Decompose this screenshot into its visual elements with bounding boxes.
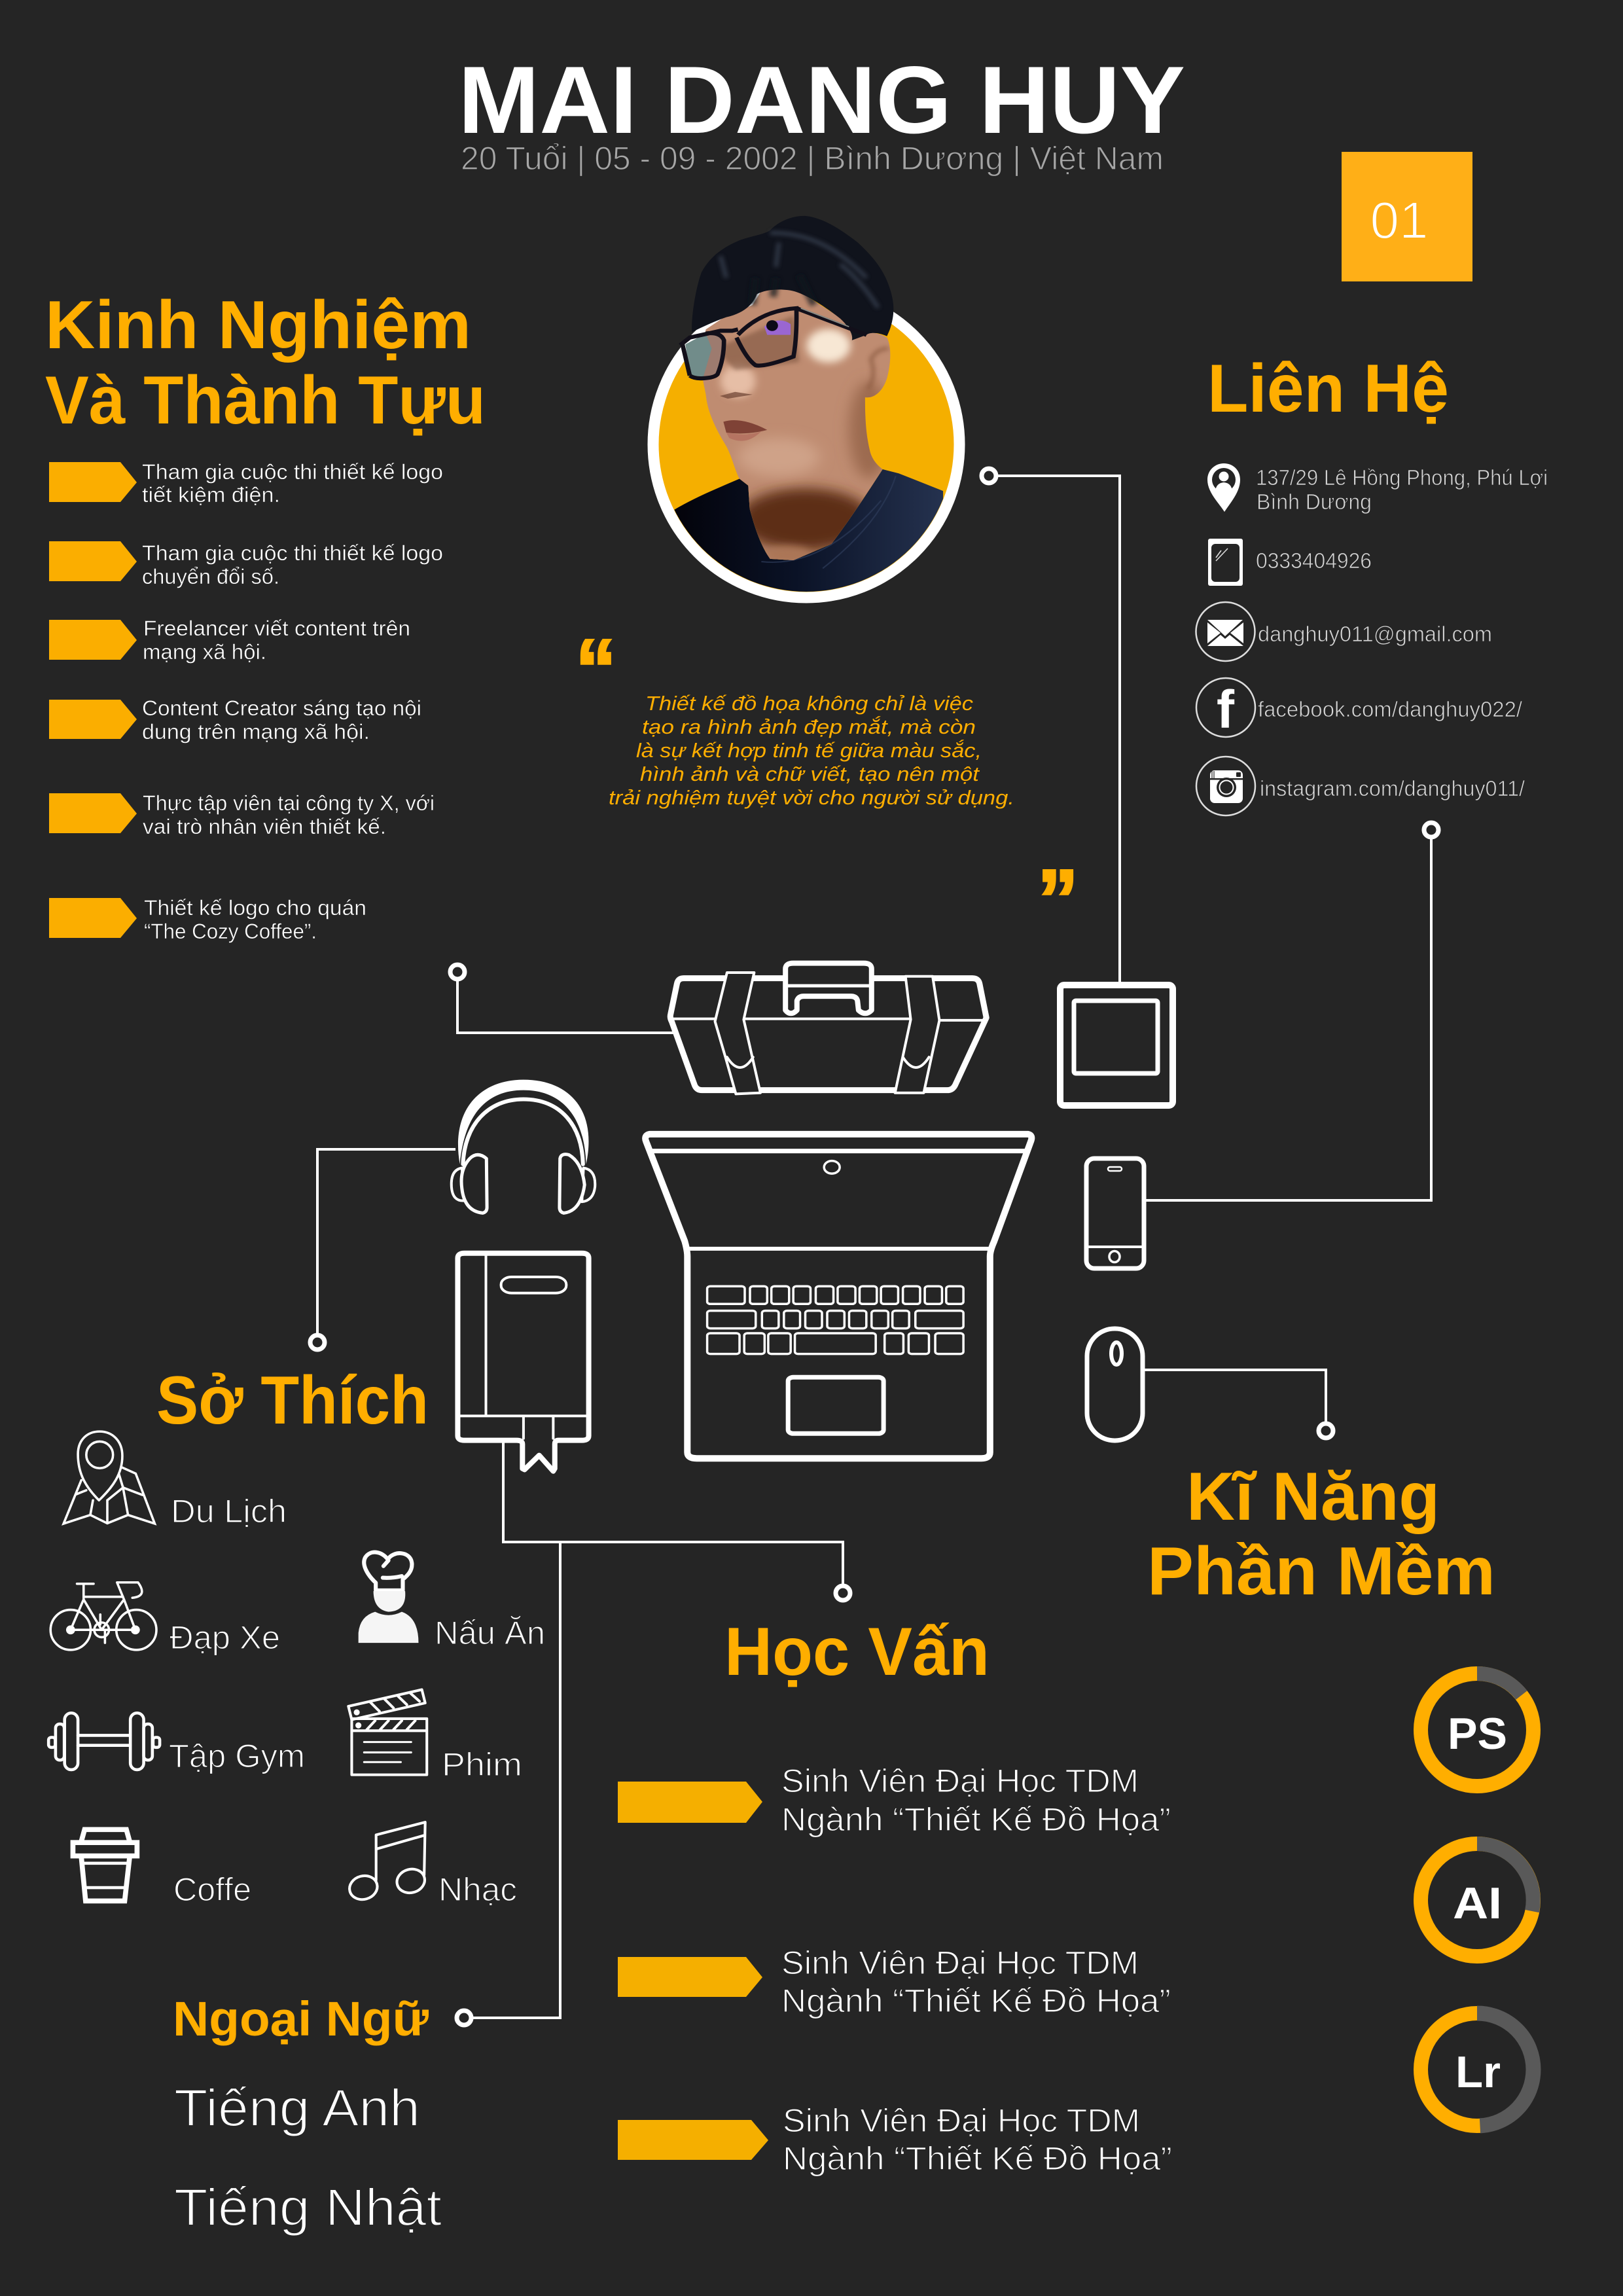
quote text: trải nghiệm tuyệt vời cho người sử dụng. <box>609 786 1014 809</box>
hobby: music: Nhạc <box>438 1871 517 1908</box>
quote text: Thiết kế đồ họa không chỉ là việc <box>645 692 974 715</box>
hobby: coffee <box>73 1829 251 1908</box>
subtitle: personal details: 20 Tuổi | 05 - 09 - 2002 | Bình Dương | Việt Nam <box>461 140 1164 177</box>
education item 2: Sinh Viên Đại Học TDM <box>781 1945 1139 1981</box>
closing quote mark: ” <box>1037 852 1079 947</box>
heading: experience: Kinh Nghiệm <box>45 287 471 363</box>
icon: mail <box>1196 602 1255 661</box>
education item 1 <box>618 1763 1171 1838</box>
education item 2 <box>618 1945 1171 2019</box>
item: logo contest energy: Tham gia cuộc thi thiết kế logo <box>142 460 443 484</box>
heading: languages: Ngoại Ngữ <box>173 1992 429 2046</box>
panel: education <box>618 1614 1172 2177</box>
address: 137/29 Lê Hồng Phong, Phú Lợi <box>1256 465 1548 490</box>
item: internship: vai trò nhân viên thiết kế. <box>143 815 386 838</box>
icon: book <box>457 1253 589 1471</box>
skill ring: Lr: Lr <box>1455 2047 1501 2097</box>
icon: facebook: f <box>1217 680 1235 740</box>
hobby: cooking: Nấu Ăn <box>435 1615 545 1651</box>
item: content creator: Content Creator sáng tạo nội <box>142 696 421 720</box>
page number badge <box>1342 152 1472 281</box>
icon: tablet <box>1060 985 1173 1105</box>
panel: hobbies <box>48 1363 545 1908</box>
hobby: film: Phim <box>442 1746 522 1783</box>
page number badge: 01 <box>1370 191 1428 249</box>
hobby: gym: Tập Gym <box>169 1738 305 1774</box>
panel: experience <box>45 287 486 943</box>
education item 3: Sinh Viên Đại Học TDM <box>783 2102 1140 2139</box>
item: internship: Thực tập viên tại công ty X, với <box>143 791 435 815</box>
hobby: travel: Du Lịch <box>171 1493 287 1530</box>
opening quote mark: “ <box>575 621 616 717</box>
icon: headphones <box>452 1080 595 1213</box>
icon: instagram <box>1196 757 1255 816</box>
heading: education: Học Vấn <box>724 1614 990 1690</box>
heading: hobbies: Sở Thích <box>156 1363 429 1439</box>
heading: software skills <box>1147 1459 1495 1609</box>
hobby: coffee: Coffe <box>173 1871 251 1908</box>
title: MAI DANG HUY <box>458 46 1185 153</box>
hobby: film <box>348 1690 522 1783</box>
icon: phone <box>1208 539 1243 586</box>
skill ring: AI: AI <box>1453 1878 1502 1928</box>
item: freelancer: mạng xã hội. <box>143 640 266 664</box>
panel: languages <box>173 1992 442 2236</box>
item: content creator: dung trên mạng xã hội. <box>142 720 370 744</box>
icon: briefcase <box>670 963 986 1094</box>
quote block <box>575 621 1079 947</box>
connector: mouse to skills <box>1144 1370 1333 1438</box>
quote text: tạo ra hình ảnh đẹp mắt, mà còn <box>642 715 976 738</box>
heading: experience: Và Thành Tựu <box>45 363 486 439</box>
item: logo contest digital <box>49 541 443 588</box>
hobby: travel <box>63 1431 287 1530</box>
portrait photo <box>653 216 959 603</box>
language: Japanese: Tiếng Nhật <box>174 2178 442 2236</box>
hobby: cycling: Đạp Xe <box>169 1619 280 1656</box>
hobby: gym <box>48 1713 305 1774</box>
connector: photo to tablet <box>982 469 1120 982</box>
item: coffee logo: Thiết kế logo cho quán <box>144 896 366 920</box>
hobby: cycling <box>50 1583 280 1656</box>
item: logo contest digital: Tham gia cuộc thi thiết kế logo <box>142 541 443 565</box>
skill ring: PS: PS <box>1448 1709 1507 1759</box>
panel: contact <box>1196 351 1548 816</box>
heading: software skills: Kĩ Năng <box>1186 1459 1440 1535</box>
facebook url: facebook.com/danghuy022/ <box>1258 697 1523 721</box>
item: freelancer: Freelancer viết content trên <box>143 617 410 640</box>
skill ring: Lr <box>1421 2013 1533 2126</box>
item: internship <box>49 791 435 838</box>
icon: location pin <box>1207 463 1240 512</box>
icon: facebook <box>1196 678 1255 740</box>
icon: mouse <box>1087 1329 1143 1441</box>
item: logo contest energy <box>49 460 443 507</box>
hobby: cooking <box>359 1552 545 1651</box>
item: content creator <box>49 696 421 744</box>
item: coffee logo: “The Cozy Coffee”. <box>144 920 317 943</box>
quote text: hình ảnh và chữ viết, tạo nên một <box>640 762 980 785</box>
address: Bình Dương <box>1257 490 1372 514</box>
item: coffee logo <box>49 896 366 943</box>
heading: contact: Liên Hệ <box>1207 351 1449 427</box>
skill ring: PS <box>1421 1674 1533 1786</box>
email: danghuy011@gmail.com <box>1258 622 1492 646</box>
heading: experience <box>45 287 486 439</box>
panel: software skills <box>1147 1459 1533 2126</box>
skill ring: AI <box>1421 1844 1533 1956</box>
connector: experience to briefcase <box>450 965 674 1033</box>
connector: hobbies to headphones <box>310 1149 455 1350</box>
education item 1: Sinh Viên Đại Học TDM <box>781 1763 1139 1799</box>
education item 3 <box>618 2102 1172 2177</box>
instagram url: instagram.com/danghuy011/ <box>1260 776 1525 800</box>
connector: book to education and languages <box>457 1440 850 2025</box>
icon: laptop <box>645 1134 1031 1458</box>
icon: smartphone <box>1086 1158 1144 1268</box>
address <box>1256 465 1548 514</box>
education item 3: Ngành “Thiết Kế Đồ Họa” <box>783 2140 1172 2177</box>
quote text <box>609 692 1014 809</box>
item: logo contest digital: chuyển đổi số. <box>142 565 279 588</box>
education item 2: Ngành “Thiết Kế Đồ Họa” <box>781 1982 1171 2019</box>
heading: software skills: Phần Mềm <box>1147 1534 1495 1609</box>
language: English: Tiếng Anh <box>174 2079 420 2137</box>
hobby: music <box>347 1822 517 1908</box>
item: freelancer <box>49 617 410 664</box>
connector: contact to phone <box>1145 823 1438 1200</box>
item: logo contest energy: tiết kiệm điện. <box>142 483 280 507</box>
phone number: 0333404926 <box>1256 548 1372 573</box>
quote text: là sự kết hợp tinh tế giữa màu sắc, <box>636 739 982 762</box>
education item 1: Ngành “Thiết Kế Đồ Họa” <box>781 1801 1171 1838</box>
